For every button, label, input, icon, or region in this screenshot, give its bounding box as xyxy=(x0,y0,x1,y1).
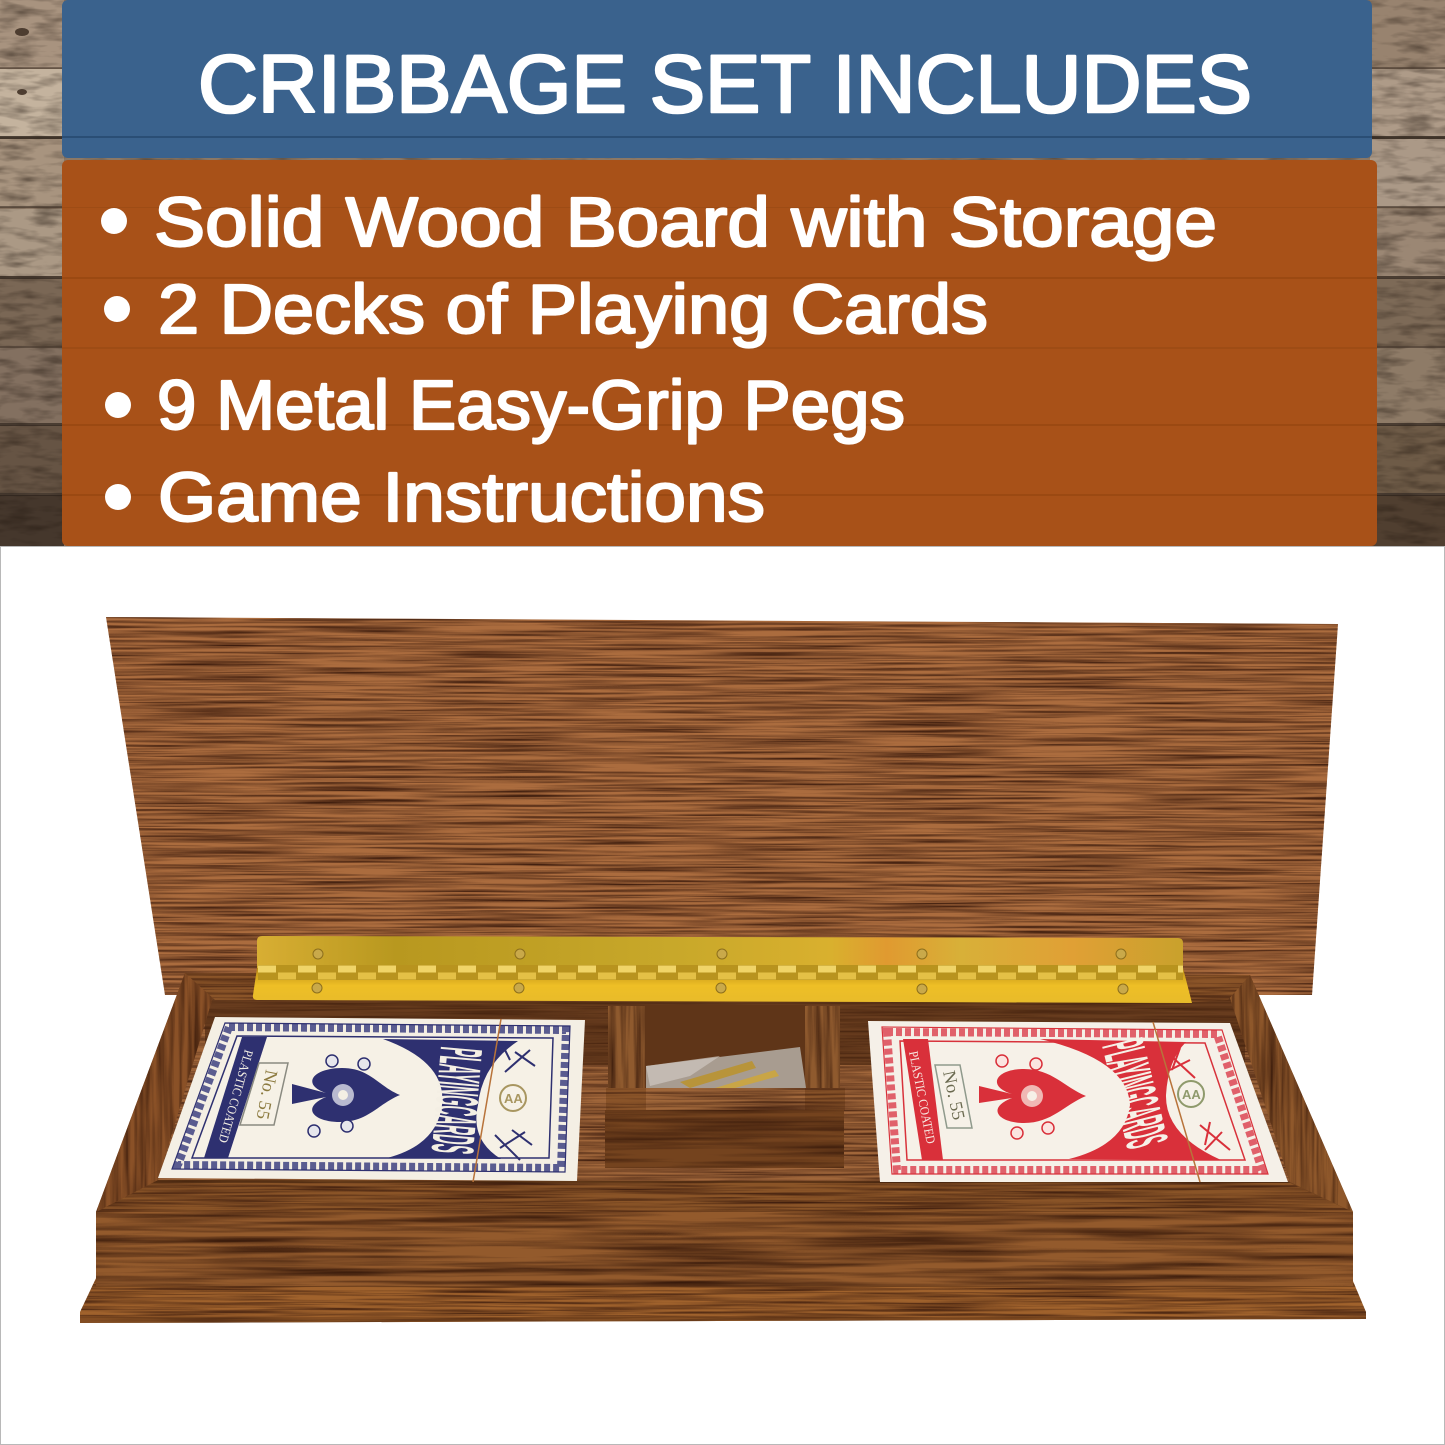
card number label: No. 55 xyxy=(253,1068,282,1121)
card emblem xyxy=(495,1050,535,1160)
spade emblem xyxy=(292,1055,400,1137)
peg compartment xyxy=(605,1005,845,1168)
brass hinge xyxy=(253,936,1192,1003)
spade emblem xyxy=(979,1055,1086,1139)
card side text: PLASTIC COATED xyxy=(906,1050,939,1145)
card number label xyxy=(935,1065,972,1128)
card side band xyxy=(903,1039,943,1160)
tear strip xyxy=(473,1019,501,1182)
card side band xyxy=(204,1037,267,1158)
list item: playing cards: 2 Decks of Playing Cards xyxy=(158,270,988,348)
panel: included items list xyxy=(62,160,1377,546)
compartment back xyxy=(644,1005,806,1095)
title: CRIBBAGE SET INCLUDES xyxy=(198,39,1252,130)
card emblem: AA xyxy=(1182,1087,1201,1102)
box back corner left xyxy=(186,974,256,1000)
red deck of playing cards xyxy=(868,1021,1288,1182)
list item: game instructions: Game Instructions xyxy=(158,458,765,536)
bag of metal pegs xyxy=(646,1047,806,1088)
blue deck of playing cards xyxy=(158,1017,585,1182)
box base moulding xyxy=(80,1278,1366,1323)
box front face xyxy=(96,1212,1353,1286)
storage interior xyxy=(150,985,1300,1185)
list item: solid wood board: Solid Wood Board with Storage xyxy=(154,183,1217,261)
card number label: No. 55 xyxy=(939,1069,969,1122)
open cribbage box lid xyxy=(100,610,1345,1000)
header panel xyxy=(62,0,1372,158)
card emblem: AA xyxy=(504,1091,523,1106)
box rim left xyxy=(96,974,212,1212)
compartment front face xyxy=(605,1110,844,1168)
list item: metal pegs: 9 Metal Easy-Grip Pegs xyxy=(157,366,905,444)
tear strip xyxy=(1153,1022,1200,1182)
navy brand panel xyxy=(383,1039,518,1159)
box back corner right xyxy=(1185,975,1250,1002)
product photo frame xyxy=(0,546,1444,1444)
compartment front top xyxy=(606,1088,845,1110)
card number label xyxy=(240,1063,288,1125)
red brand panel xyxy=(1040,1039,1221,1160)
box rim front xyxy=(96,1180,1352,1212)
wood plank background strip xyxy=(0,0,1445,546)
compartment posts xyxy=(608,1006,840,1102)
card side text: PLASTIC COATED xyxy=(216,1048,257,1145)
box body underlay xyxy=(96,973,1353,1212)
box rim right xyxy=(1225,970,1357,1215)
card emblem xyxy=(1170,1048,1230,1150)
